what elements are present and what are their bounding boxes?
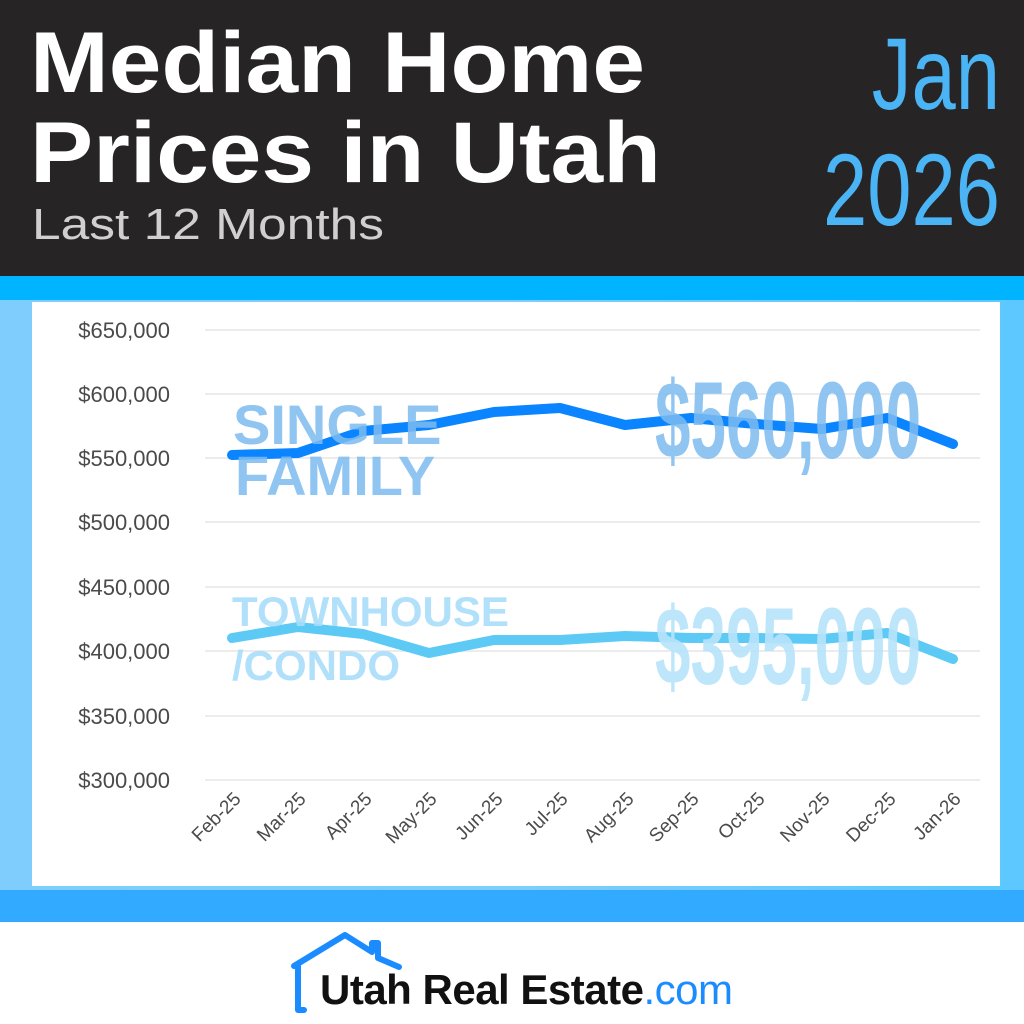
title: Median Home [30,15,645,111]
footer logo [291,932,732,1013]
single family line [232,408,953,455]
logo text: Utah Real Estate.com [320,966,732,1013]
value townhouse: $395,000 [655,586,921,708]
date: Jan [872,17,1000,131]
x axis labels: Dec-25 [842,789,901,847]
header panel [0,0,1024,276]
label townhouse [232,588,509,689]
date: 2026 [823,133,1000,247]
label single family: FAMILY [235,444,435,507]
x axis labels: Oct-25 [714,789,770,844]
date [823,17,1000,247]
x axis labels: Jan-26 [910,789,966,845]
y axis labels: $600,000 [78,382,170,407]
x axis labels: Mar-25 [253,789,311,846]
x axis labels: Feb-25 [188,789,246,846]
chart panel [32,302,1000,886]
x axis labels: Nov-25 [776,789,835,847]
blue frame [0,276,1024,922]
y axis labels: $350,000 [78,704,170,729]
y axis labels: $300,000 [78,768,170,793]
y axis labels: $450,000 [78,575,170,600]
y axis labels: $550,000 [78,446,170,471]
y axis labels: $500,000 [78,510,170,535]
label single family [233,393,441,507]
label single family: SINGLE [233,393,441,456]
y axis labels: $650,000 [78,318,170,343]
label townhouse: /CONDO [232,642,400,689]
x axis labels: Aug-25 [580,789,639,847]
townhouse line [232,627,953,659]
subtitle: Last 12 Months [32,200,384,249]
title [30,15,661,201]
title: Prices in Utah [30,105,661,201]
icon: house [291,932,402,1013]
x axis labels: Jun-25 [452,789,508,845]
value single family: $560,000 [655,360,921,482]
y axis labels: $400,000 [78,639,170,664]
x axis labels [188,789,966,848]
label townhouse: TOWNHOUSE [232,588,509,635]
x axis labels: Apr-25 [321,789,377,844]
x axis labels: Jul-25 [521,789,573,840]
x axis labels: May-25 [382,789,442,848]
y axis labels [78,318,170,793]
x axis labels: Sep-25 [645,789,704,847]
